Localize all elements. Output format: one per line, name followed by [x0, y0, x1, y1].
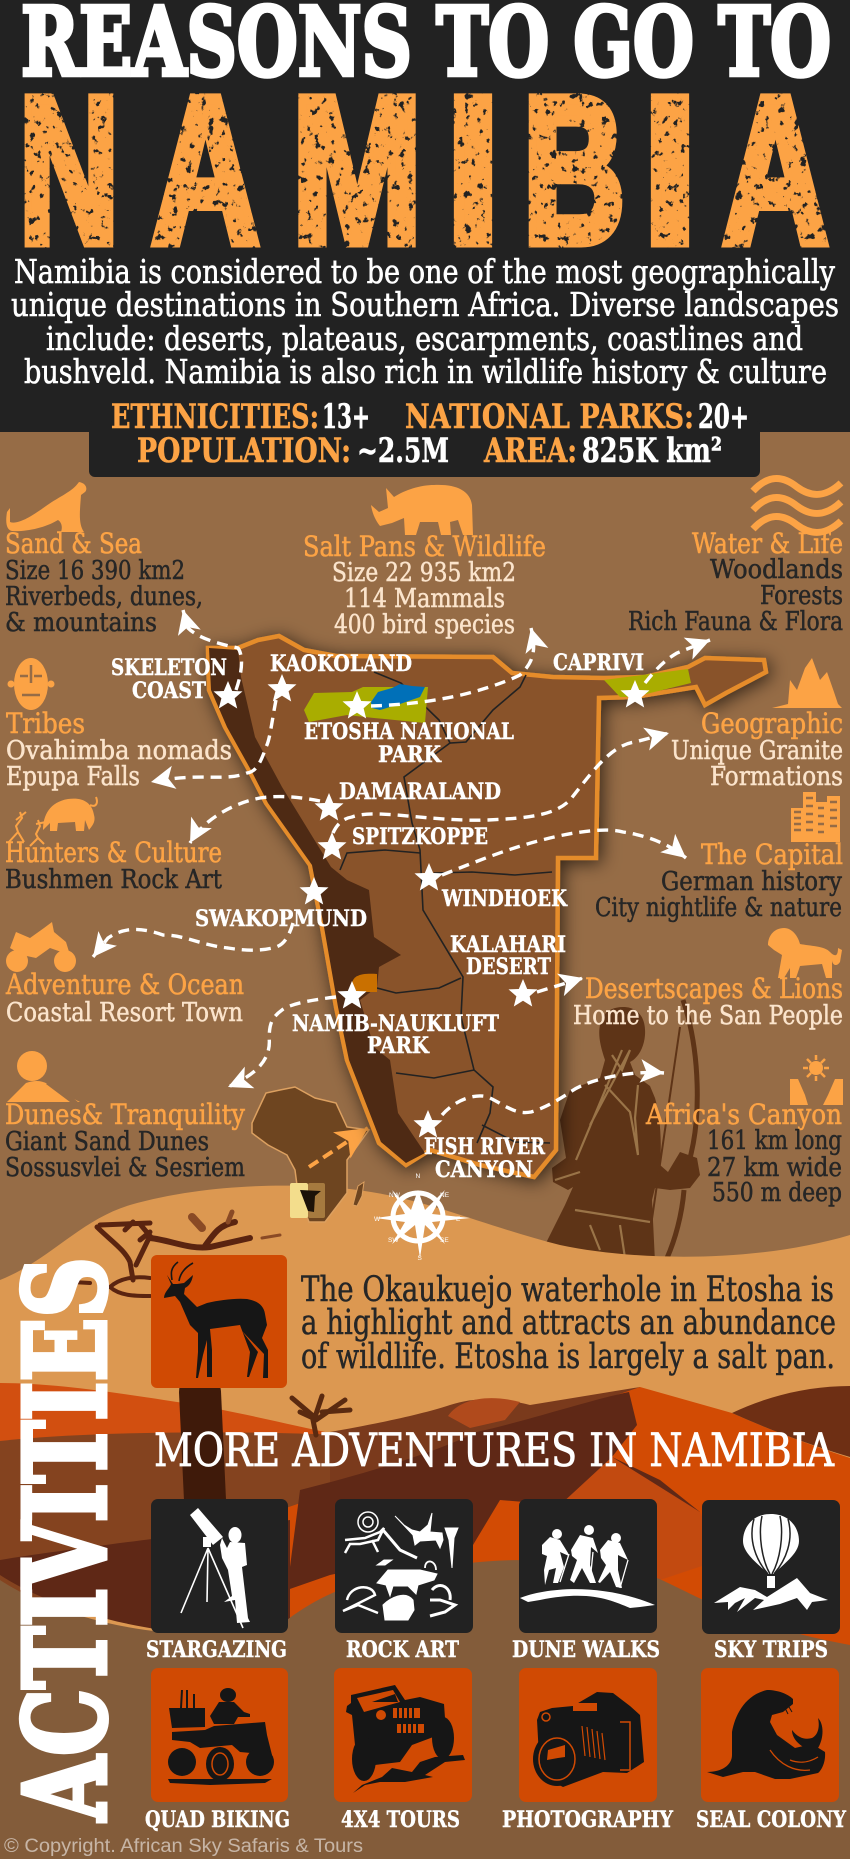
panel: dunes & tranquility — [5, 1051, 245, 1183]
etosha national park — [304, 687, 428, 723]
icon: rhino — [371, 485, 473, 535]
panel: water & life: Woodlands — [710, 555, 843, 585]
location stars — [214, 674, 650, 1138]
namibia distressed heading: I — [643, 55, 697, 287]
icon: tribal mask — [8, 658, 54, 710]
panel: adventure & ocean: Adventure & Ocean — [5, 968, 244, 1001]
panel: dunes & tranquility: Dunes& Tranquility — [5, 1098, 245, 1131]
panel: adventure & ocean — [5, 922, 244, 1028]
stats panel: ~2.5M — [357, 431, 449, 471]
activity: photography: PHOTOGRAPHY — [502, 1807, 673, 1833]
icon: city buildings — [791, 792, 840, 842]
panel: hunters & culture: Bushmen Rock Art — [5, 865, 222, 895]
namibia map — [208, 636, 766, 1177]
map place labels: NAMIB-NAUKLUFT — [292, 1011, 500, 1037]
caprivi strip park — [604, 669, 691, 697]
stats panel: 20+ — [698, 397, 749, 437]
icon: quad bike — [6, 922, 76, 972]
map place labels: SKELETON — [111, 655, 227, 681]
activity: rock art — [335, 1499, 473, 1663]
activity: rock art: ROCK ART — [346, 1637, 460, 1663]
okaukuejo waterhole text — [301, 1270, 836, 1377]
stats panel: 825K km² — [582, 431, 722, 471]
icon: sun over dunes — [7, 1051, 80, 1102]
icon: sea lion — [6, 482, 86, 532]
background dune landscape — [0, 1186, 850, 1859]
map place labels: WINDHOEK — [441, 886, 568, 912]
panel: dunes & tranquility: Sossusvlei & Sesriem — [5, 1153, 245, 1183]
panel: sand & sea: Size 16 390 km2 — [5, 556, 185, 586]
panel: tribes: Ovahimba nomads — [6, 736, 232, 766]
namibia distressed heading: N — [19, 55, 119, 287]
map place labels — [111, 650, 644, 1183]
namibia distressed heading: M — [292, 55, 422, 287]
map place labels: COAST — [132, 678, 207, 704]
activity: stargazing: STARGAZING — [146, 1637, 287, 1663]
panel: water & life — [628, 478, 843, 637]
stats panel: ETHNICITIES: — [111, 397, 319, 437]
icon: lion — [768, 928, 842, 978]
stats panel: AREA: — [483, 431, 577, 471]
stats panel: NATIONAL PARKS: — [405, 397, 694, 437]
intro paragraph — [11, 252, 839, 391]
panel: salt pans & wildlife — [303, 485, 546, 640]
namibia distressed heading — [19, 55, 828, 287]
header band — [0, 0, 850, 432]
panel: salt pans & wildlife: Size 22 935 km2 — [332, 558, 516, 588]
map place labels: SPITZKOPPE — [352, 824, 488, 850]
activity: photography — [502, 1668, 673, 1833]
compass rose — [374, 1173, 470, 1262]
compass rose: E — [456, 1216, 461, 1223]
panel: adventure & ocean: Coastal Resort Town — [6, 998, 243, 1028]
copyright: © Copyright. African Sky Safaris & Tours — [4, 1836, 363, 1857]
activity: dune walks — [512, 1499, 660, 1663]
map place labels: DESERT — [466, 954, 552, 980]
icon: antelope — [164, 1262, 268, 1378]
panel: the capital — [595, 792, 843, 923]
panel: tribes: Epupa Falls — [6, 762, 140, 792]
compass rose: S — [418, 1255, 422, 1262]
map place labels: ETOSHA NATIONAL — [304, 719, 514, 745]
activity: quad biking — [145, 1668, 290, 1833]
hunter silhouette — [545, 1000, 700, 1262]
namibia distressed heading: I — [446, 55, 500, 287]
acacia tree silhouette — [72, 1212, 280, 1500]
panel: salt pans & wildlife: 400 bird species — [334, 610, 515, 640]
icon: sun and canyon — [790, 1055, 843, 1105]
activity: quad biking: QUAD BIKING — [145, 1807, 290, 1833]
map place labels: PARK — [367, 1033, 430, 1059]
map place labels: CANYON — [435, 1157, 533, 1183]
panel: hunters & culture — [5, 797, 222, 895]
map place labels: CAPRIVI — [553, 650, 644, 676]
panel: tribes: Tribes — [6, 707, 85, 740]
namibia distressed heading: B — [523, 55, 625, 287]
stats panel: 13+ — [322, 397, 370, 437]
panel: dunes & tranquility: Giant Sand Dunes — [5, 1127, 209, 1157]
map place labels: KALAHARI — [450, 932, 566, 958]
activity: 4x4 tours: 4X4 TOURS — [341, 1807, 460, 1833]
coastal desert strip — [209, 648, 425, 1163]
etosha salt pan — [371, 684, 425, 710]
icon: waves — [753, 478, 841, 532]
compass rose: SE — [440, 1237, 449, 1244]
africa locator map — [252, 1087, 369, 1222]
namib orange patch — [352, 974, 377, 992]
compass rose: W — [374, 1216, 381, 1223]
panel: sand & sea — [5, 482, 203, 638]
map place labels: FISH RIVER — [424, 1134, 546, 1160]
map place labels: KAOKOLAND — [270, 651, 412, 677]
route arrows — [93, 610, 710, 1115]
panel: tribes — [6, 658, 232, 792]
activity: sky trips — [702, 1500, 840, 1663]
panel: sand & sea: Riverbeds, dunes, — [5, 582, 203, 612]
vertical activities heading: ACTIVITIES — [1, 1257, 132, 1822]
compass rose: NE — [440, 1192, 450, 1199]
namibia distressed heading: A — [152, 55, 259, 287]
activity: 4x4 tours — [334, 1668, 472, 1833]
panel: sand & sea: & mountains — [5, 608, 157, 638]
activity: dune walks: DUNE WALKS — [512, 1637, 660, 1663]
map place labels: PARK — [378, 742, 442, 768]
map place labels: SWAKOPMUND — [195, 906, 367, 932]
small desert shrub — [292, 1396, 350, 1435]
stats panel — [89, 397, 760, 477]
panel: geographic — [671, 658, 843, 792]
compass rose: NW — [389, 1192, 401, 1199]
map place labels: DAMARALAND — [339, 779, 501, 805]
compass rose: N — [416, 1173, 420, 1180]
panel: africa's canyon — [645, 1055, 843, 1208]
stats panel: POPULATION: — [137, 431, 351, 471]
icon: mammoth and hunters — [8, 797, 97, 846]
activity: sky trips: SKY TRIPS — [714, 1637, 828, 1663]
panel: salt pans & wildlife: Salt Pans & Wildlife — [303, 530, 546, 563]
panel: desertscapes & lions — [573, 928, 843, 1031]
compass rose: SW — [388, 1237, 399, 1244]
region borders — [340, 672, 552, 1143]
panel: sand & sea: Sand & Sea — [5, 527, 142, 560]
icon: granite mountain — [772, 658, 842, 708]
panel: hunters & culture: Hunters & Culture — [5, 836, 222, 869]
panel: antelope tile — [151, 1255, 287, 1388]
activity: stargazing — [146, 1499, 288, 1663]
activity: seal colony — [696, 1668, 846, 1833]
panel: salt pans & wildlife: 114 Mammals — [344, 584, 505, 614]
